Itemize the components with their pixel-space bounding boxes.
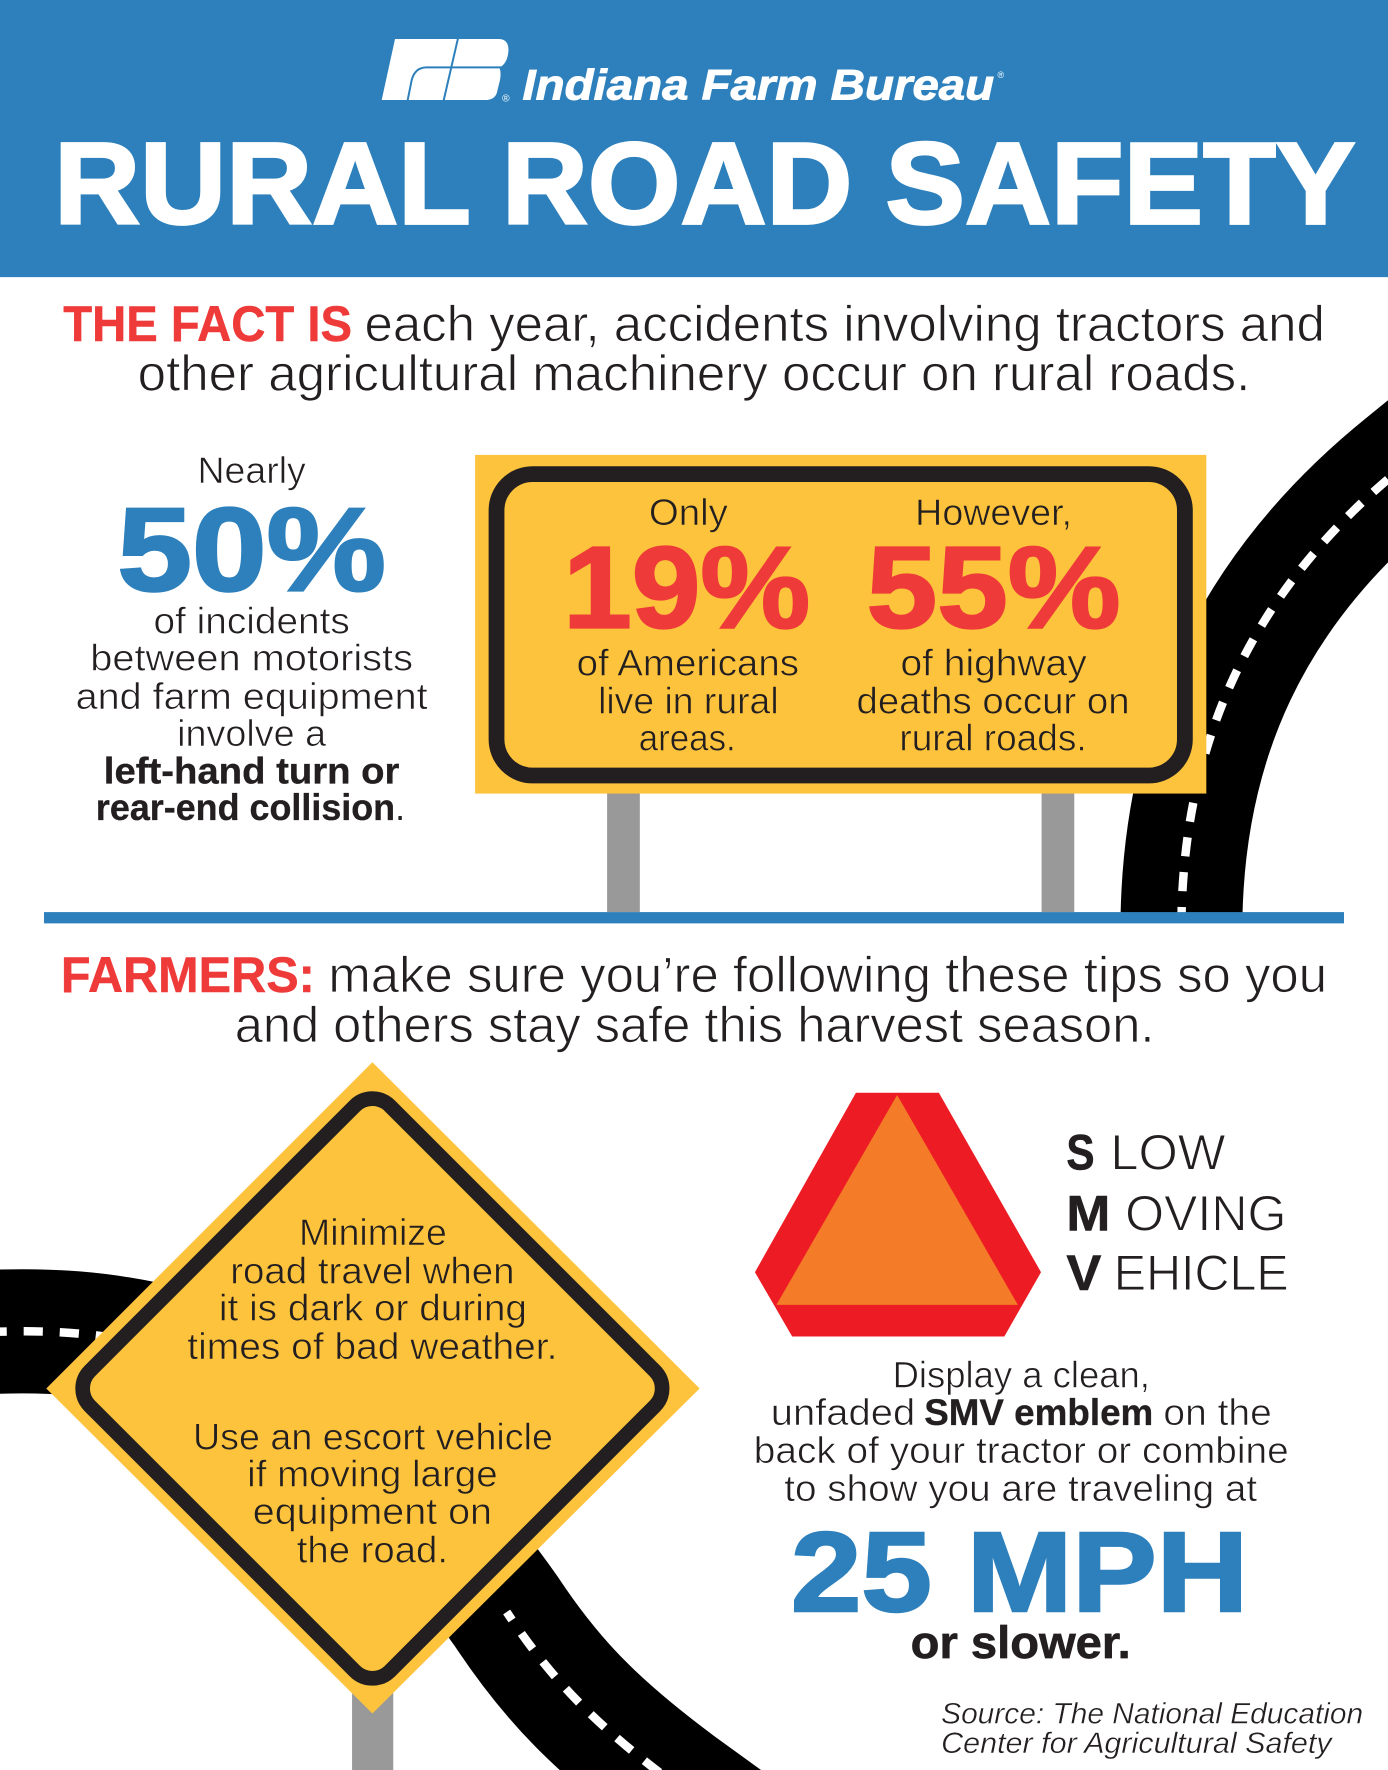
stat: nearly 50 percent: rear-end collision.: [96, 786, 405, 828]
tip: minimize road travel: road travel when: [230, 1249, 515, 1291]
billboard sign: [475, 455, 1206, 794]
stat: 19 percent: of Americans: [577, 642, 799, 684]
source note: Center for Agricultural Safety: [941, 1727, 1334, 1760]
SMV acronym: OVING: [1125, 1185, 1286, 1241]
source note: Source: The National Education: [941, 1698, 1363, 1731]
SMV emblem instructions: to show you are traveling at: [784, 1467, 1258, 1509]
source note: [941, 1698, 1363, 1760]
icon: Farm Bureau logo: [382, 37, 508, 102]
stat: nearly 50 percent: between motorists: [90, 637, 413, 679]
road: upper right curve: [1181, 387, 1388, 917]
stat: nearly 50 percent: involve a: [177, 712, 326, 754]
tip: minimize road travel: Minimize: [299, 1211, 447, 1253]
stat: 55 percent: 55%: [867, 523, 1121, 653]
SMV acronym: S: [1066, 1124, 1095, 1180]
intro statement: other agricultural machinery occur on rural roads.: [138, 346, 1250, 402]
stat: nearly 50 percent: 50%: [117, 484, 386, 616]
speed callout: or slower.: [911, 1617, 1131, 1668]
SMV acronym: LOW: [1110, 1124, 1226, 1180]
farmers heading: and others stay safe this harvest season.: [235, 997, 1154, 1053]
stat: 19 percent: [563, 491, 810, 759]
stat: 19 percent: areas.: [639, 717, 736, 759]
diamond sign post: [352, 1688, 393, 1770]
organisation name: Indiana Farm Bureau: [522, 61, 994, 109]
tip: minimize road travel: [187, 1211, 557, 1367]
farmers heading: [61, 947, 1327, 1053]
diamond warning sign: [46, 1062, 700, 1714]
stat: 19 percent: live in rural: [598, 679, 779, 721]
stat: nearly 50 percent: of incidents: [153, 599, 350, 641]
section divider: [44, 912, 1344, 923]
stat: 19 percent: 19%: [563, 523, 810, 653]
stat: nearly 50 percent: [76, 449, 428, 828]
tip: escort vehicle: if moving large: [247, 1453, 498, 1495]
SMV emblem instructions: SMV emblem: [924, 1391, 1153, 1433]
intro statement: each year, accidents involving tractors and: [364, 296, 1325, 352]
SMV emblem instructions: [754, 1353, 1289, 1509]
stat: 55 percent: However,: [915, 491, 1072, 533]
tip: escort vehicle: Use an escort vehicle: [193, 1415, 553, 1457]
SMV acronym: [1066, 1124, 1289, 1301]
tip: minimize road travel: times of bad weather.: [187, 1325, 557, 1367]
stat: nearly 50 percent: left-hand turn or: [104, 749, 399, 791]
stat: 55 percent: rural roads.: [899, 717, 1087, 759]
tip: escort vehicle: the road.: [297, 1528, 448, 1570]
tip: escort vehicle: [193, 1415, 553, 1570]
icon: SMV emblem: [755, 1093, 1041, 1337]
registered mark by name: ®: [998, 70, 1005, 80]
billboard posts: [607, 790, 1074, 912]
SMV emblem instructions: on the: [1163, 1391, 1272, 1433]
registered mark by logo: ®: [502, 94, 510, 105]
header banner: [0, 0, 1388, 277]
SMV acronym: V: [1066, 1245, 1101, 1301]
SMV acronym: EHICLE: [1114, 1245, 1289, 1301]
SMV emblem instructions: unfaded: [771, 1391, 915, 1433]
speed callout: 25 MPH: [791, 1509, 1248, 1635]
SMV emblem instructions: back of your tractor or combine: [754, 1429, 1289, 1471]
stat: nearly 50 percent: and farm equipment: [76, 675, 428, 717]
stat: 55 percent: of highway: [901, 642, 1087, 684]
SMV emblem instructions: Display a clean,: [893, 1353, 1150, 1395]
intro statement: THE FACT IS: [63, 296, 352, 352]
intro statement: [63, 296, 1325, 402]
farmers heading: FARMERS:: [61, 947, 315, 1003]
tip: escort vehicle: equipment on: [253, 1490, 492, 1532]
title: RURAL ROAD SAFETY: [54, 118, 1355, 249]
stat: 55 percent: [856, 491, 1130, 759]
stat: 19 percent: Only: [649, 491, 728, 533]
stat: nearly 50 percent: Nearly: [197, 449, 306, 491]
tip: minimize road travel: it is dark or during: [219, 1287, 527, 1329]
road: lower left curve: [0, 1331, 767, 1770]
SMV acronym: M: [1066, 1185, 1110, 1241]
farmers heading: make sure you’re following these tips so you: [328, 947, 1327, 1003]
stat: 55 percent: deaths occur on: [856, 679, 1130, 721]
